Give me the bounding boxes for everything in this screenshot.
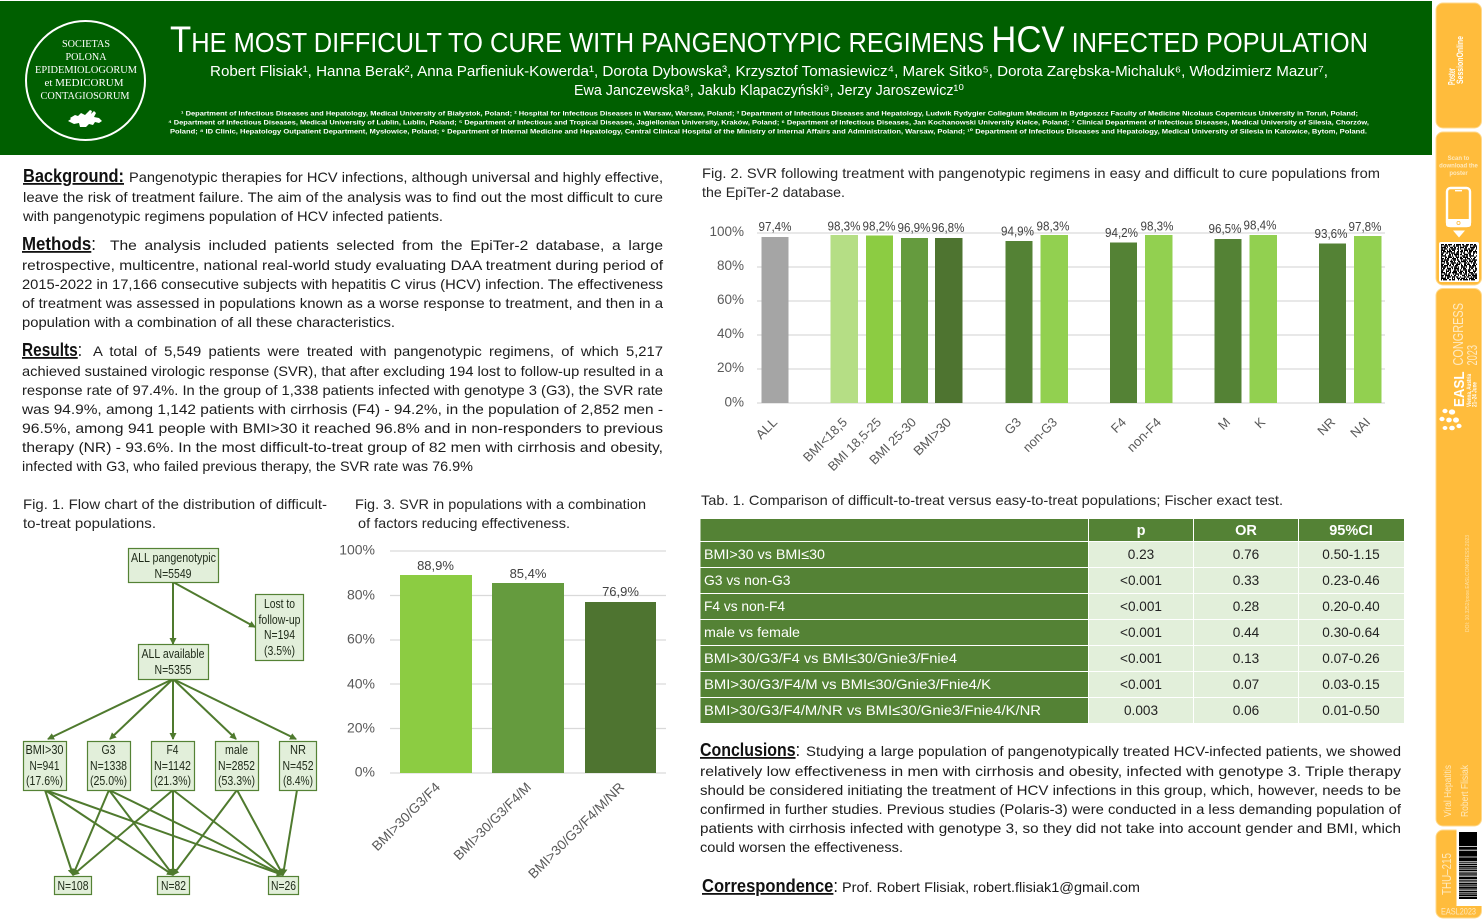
bar: K <box>1244 218 1277 431</box>
authors: Ewa Janczewska⁸, Jakub Klapaczyński⁹, Jerzy Jaroszewicz¹⁰ <box>574 82 964 99</box>
bar chart: figure 3: 60% <box>347 630 375 646</box>
box: NR <box>280 742 316 790</box>
bar: BMI 25-30 <box>866 221 930 468</box>
bar: non-G3: 98,3% <box>1036 220 1070 234</box>
bar: non-F4 <box>1124 220 1174 455</box>
bar: NR: NR <box>1314 415 1338 438</box>
bar: non-F4: 98,3% <box>1140 220 1174 234</box>
sidebar panel: scan to download: poster <box>1449 171 1468 177</box>
bar: F4: 94,2% <box>1105 226 1138 240</box>
bar: BMI>30/G3/F4/M/NR: BMI>30/G3/F4/M/NR <box>525 779 627 881</box>
text block: correspondence: Prof. Robert Flisiak, robert.flisiak1@gmail.com <box>842 879 1140 895</box>
sidebar panel: EASL Congress: Robert Flisiak <box>1460 764 1471 817</box>
box: F4: N=1142 <box>154 759 191 773</box>
logo: Societas Polona: SOCIETAS <box>62 39 110 50</box>
table row: BMI <box>704 546 1380 562</box>
box: G3: G3 <box>102 743 116 757</box>
box: F4: F4 <box>166 743 179 757</box>
box: N=108: N=108 <box>58 879 89 893</box>
caption: figure 3: of factors reducing effectiveness. <box>358 515 570 531</box>
table row: BMI/G3/F4: 0.13 <box>1233 651 1259 666</box>
bar: BMI 18,5-25 <box>825 220 896 474</box>
bar: F4 <box>1105 226 1138 436</box>
flow chart <box>24 548 316 894</box>
text block: results: response rate of 97.4%. In the group of 1,338 patients infected with genotype 3 (G3), the SVR rate <box>22 382 663 398</box>
header banner <box>0 1 1432 155</box>
table row: BMI: 0.76 <box>1233 547 1259 562</box>
caption: table 1: Tab. 1. Comparison of difficult-to-treat versus easy-to-treat populations; Fischer exact test. <box>701 492 1283 508</box>
sidebar panel: EASL Congress: Vienna, Austria <box>1467 374 1473 407</box>
sidebar panel: scan to download: download the <box>1439 164 1478 170</box>
sidebar panel: EASL Congress: EASL <box>1451 372 1468 407</box>
text block: results: achieved sustained virologic response (SVR), that after excluding 194 lost to follow-up resulted in a <box>22 363 663 379</box>
table row: F4: F4 vs non-F4 <box>704 598 785 614</box>
bar: NR <box>1314 227 1348 438</box>
box: N=26 <box>268 876 298 894</box>
box: N=82 <box>158 876 190 894</box>
y axis labels: 100% <box>709 224 744 239</box>
affiliations <box>168 110 1369 136</box>
logo: Societas Polona: et MEDICORUM <box>44 78 124 89</box>
box: male: N=2852 <box>218 759 255 773</box>
text block: methods: retrospective, multicentre, national real-world study evaluating DAA treatment during period of <box>22 257 663 273</box>
sidebar panel: poster number and barcode: EASL2023 <box>1441 906 1476 916</box>
text block: conclusions: Studying a large population of pangenotypically treated HCV-infected patients, we showed <box>806 743 1401 759</box>
table row: BMI/G3/F4/M: <0.001 <box>1120 677 1162 692</box>
authors <box>210 63 1328 99</box>
bar: ALL: 97,4% <box>758 220 792 234</box>
box: G3: (25.0%) <box>90 774 127 788</box>
bar: BMI>30/G3/F4: BMI>30/G3/F4 <box>369 779 443 854</box>
title: THE MOST DIFFICULT TO CURE WITH PANGENOTYPIC REGIMENS HCV INFECTED POPULATION <box>170 18 1368 60</box>
box: all available <box>138 644 208 680</box>
table row: G3: 0.33 <box>1233 573 1259 588</box>
text block: methods: 2015-2022 in 17,166 consecutive subjects with hepatitis C virus (HCV) infection. The effectiveness <box>22 276 663 292</box>
heading: background: Background: <box>23 166 124 186</box>
box: NR: (8.4%) <box>283 774 313 788</box>
icon: EASL flower <box>1439 409 1462 430</box>
bar: non-G3: non-G3 <box>1020 415 1060 455</box>
sidebar panel: poster session online: SessionOnline <box>1455 36 1465 84</box>
bar: non-F4: non-F4 <box>1124 415 1164 455</box>
bar: NAI <box>1347 220 1382 440</box>
table row: male: 0.44 <box>1233 625 1260 640</box>
text block: conclusions: should be considered initiating the treatment of HCV infections in this group, which, however, needs to be <box>700 782 1401 798</box>
text block: correspondence <box>702 876 1140 896</box>
box: male <box>216 742 258 790</box>
heading: results: Results: <box>22 340 82 360</box>
box: all pangenotypic <box>128 548 218 582</box>
logo: Societas Polona: EPIDEMIOLOGORUM <box>35 65 137 76</box>
bar chart: figure 3: 20% <box>347 720 375 736</box>
table row: G3: 0.23-0.46 <box>1322 573 1380 588</box>
caption: figure 2: the EpiTer-2 database. <box>702 184 845 200</box>
text block: results: was 94.9%, among 1,142 patients with cirrhosis (F4) - 94.2%, in the population of 2,852 men - <box>21 401 663 417</box>
sidebar panel: EASL Congress: Viral Hepatitis <box>1443 765 1454 817</box>
box: lost to follow-up: Lost to <box>264 597 295 611</box>
box: G3 <box>88 742 130 790</box>
sidebar panel: EASL Congress <box>1436 288 1482 826</box>
caption: figure 2 <box>702 165 1380 200</box>
text block: conclusions: confirmed in further studies. Previous studies (Polaris-3) were conducted in a less demanding population of <box>700 801 1401 817</box>
box: N=26: N=26 <box>271 879 296 893</box>
y axis labels <box>709 224 744 410</box>
box: NR: N=452 <box>282 759 314 773</box>
sidebar panel: poster number and barcode <box>1436 829 1482 918</box>
bar: G3: 94,9% <box>1001 224 1034 238</box>
table row: G3 <box>704 572 1380 588</box>
text block: conclusions: could worsen the effectiveness. <box>700 839 903 855</box>
table: comparison <box>700 519 1404 723</box>
table row: BMI: 0.50-1.15 <box>1322 547 1380 562</box>
bar: G3: G3 <box>1001 415 1024 437</box>
heading: conclusions: Conclusions: <box>700 740 800 760</box>
bar: ALL: ALL <box>753 415 780 442</box>
text block: methods <box>22 234 663 330</box>
bar: NR: 93,6% <box>1314 227 1348 241</box>
text block: results: therapy (NR) - 93.6%. In the most difficult-to-treat group of 82 men with cirrhosis and obesity, <box>22 439 663 455</box>
bar: M <box>1208 222 1242 433</box>
logo: Societas Polona: POLONA <box>66 52 107 63</box>
table header <box>1137 523 1373 539</box>
bar: BMI>30/G3/F4/M <box>451 566 564 863</box>
table row: BMI/G3/F4/M <box>704 676 1380 692</box>
caption: figure 1: Fig. 1. Flow chart of the distribution of difficult- <box>23 496 327 512</box>
bar: BMI>30/G3/F4 <box>369 558 472 854</box>
bar: ALL <box>753 220 792 442</box>
authors: Robert Flisiak¹, Hanna Berak², Anna Parfieniuk-Kowerda¹, Dorota Dybowska³, Krzysztof Tomasiewicz⁴, Marek Sitko⁵, Dorota Zarębska-Michaluk⁶, Włodzimierz Mazur⁷, <box>210 63 1328 80</box>
sidebar panel: scan to download <box>1436 132 1482 285</box>
box: all available: N=5355 <box>154 663 192 677</box>
box: male: male <box>225 743 248 757</box>
text block: background: with pangenotypic regimens population of HCV infected patients. <box>22 208 443 224</box>
bar: BMI 25-30: 96,9% <box>898 221 930 235</box>
bar: BMI>30/G3/F4: 88,9% <box>417 558 454 573</box>
table row: F4: <0.001 <box>1120 599 1162 614</box>
bar chart: figure 3 <box>339 542 666 881</box>
text block: methods: The analysis included patients selected from the EpiTer-2 database, a large <box>110 237 663 253</box>
box: lost to follow-up <box>256 594 304 660</box>
bar: BMI>30/G3/F4/M/NR: 76,9% <box>602 584 639 599</box>
sidebar panel: EASL Congress: 2023 <box>1464 345 1481 366</box>
box: all available: ALL available <box>142 647 205 661</box>
text block: background: Pangenotypic therapies for HCV infections, although universal and highly effective, <box>129 169 663 185</box>
bar: BMI<18,5: BMI<18,5 <box>800 415 850 465</box>
bar: BMI<18,5 <box>800 220 860 465</box>
text block: methods: population with a combination of all these characteristics. <box>22 314 395 330</box>
bar chart: figure 3: 80% <box>347 586 375 602</box>
table row: BMI/G3/F4 <box>704 650 1380 666</box>
bar: BMI>30 <box>910 221 964 458</box>
box: F4 <box>152 742 194 790</box>
caption: figure 3: Fig. 3. SVR in populations with a combination <box>355 496 646 512</box>
sidebar panel: EASL Congress: 21–24 June <box>1472 381 1478 407</box>
table row: male <box>704 624 1380 640</box>
table header: OR <box>1235 523 1257 539</box>
sidebar panel: poster number and barcode: THU–215 <box>1439 853 1454 895</box>
table row: male: male vs female <box>704 624 800 640</box>
table row: BMI/G3/F4/M/NR: 0.01-0.50 <box>1322 703 1380 718</box>
box: F4: (21.3%) <box>154 774 191 788</box>
icon: phone <box>1446 188 1471 238</box>
bar: BMI>30/G3/F4/M/NR <box>525 584 656 881</box>
bar: M: M <box>1215 415 1233 433</box>
sidebar panel: scan to download: Scan to <box>1448 156 1470 162</box>
bar: BMI<18,5: 98,3% <box>828 220 860 234</box>
bar: BMI 18,5-25: BMI 18,5-25 <box>825 415 884 474</box>
affiliations: ¹ Department of Infectious Diseases and Hepatology, Medical University of Białystok, Poland; ² Hospital for Infectious Diseases in Warsaw, Warsaw, Poland; ³ Department of Infectious Diseases and Hepatology, Ludwik Rydygier Collegium Medicum in Bydgoszcz Faculty of Medicine Nicolaus Copernicus University in Toruń, Poland; <box>181 110 1358 118</box>
text block: background <box>22 166 663 224</box>
table row: BMI/G3/F4: BMI>30/G3/F4 vs BMI≤30/Gnie3/Fnie4 <box>704 650 957 666</box>
bar: BMI>30/G3/F4/M: BMI>30/G3/F4/M <box>451 780 534 863</box>
text block: results: 96.5%, among 941 people with BMI>30 it reached 96.8% and in non-responders to previous <box>22 420 663 436</box>
box: G3: N=1338 <box>90 759 127 773</box>
box: BMI>30: BMI>30 <box>26 743 64 757</box>
y axis labels: 0% <box>724 394 744 410</box>
table row: BMI: 0.23 <box>1128 547 1154 562</box>
bar chart: figure 3: 100% <box>339 542 375 558</box>
box: N=108 <box>54 876 92 894</box>
affiliations: Poland; ⁸ ID Clinic, Hepatology Outpatient Department, Mysłowice, Poland; ⁹ Department of Internal Medicine and Hepatology, Central Clinical Hospital of the Ministry of Internal Affairs and Administration, Warsaw, Poland; ¹⁰ Department of Infectious Diseases and Hepatology, Medical University of Silesia in Katowice, Bytom, Poland. <box>170 128 1367 136</box>
bar: non-G3 <box>1020 220 1070 455</box>
table header: 95%CI <box>1329 523 1373 539</box>
table row: BMI/G3/F4/M/NR: 0.06 <box>1233 703 1259 718</box>
y axis labels: 80% <box>717 258 744 273</box>
bar chart: figure 3: 0% <box>355 764 375 780</box>
table row: G3: <0.001 <box>1120 573 1162 588</box>
text block: conclusions: patients with cirrhosis infected with genotype 3, so they did not take into account gender and BMI, which <box>700 820 1401 836</box>
affiliations: ⁴ Department of Infectious Diseases, Medical University of Lublin, Lublin, Poland; ⁵ Department of Infectious and Tropical Diseases, Jagiellonian University, Kraków, Poland; ⁶ Department of Infectious Diseases, Jan Kochanowski University Kielce, Poland; ⁷ Clinical Department of Infectious Diseases, Medical University of Silesia, Chorzów, <box>168 120 1369 126</box>
bar: BMI 18,5-25: 98,2% <box>862 220 896 234</box>
text block: methods: of treatment was assessed in populations known as a worse response to treatment, and then in a <box>22 295 663 311</box>
box: lost to follow-up: (3.5%) <box>264 644 295 658</box>
table row: BMI: BMI>30 vs BMI≤30 <box>704 546 825 562</box>
bar: G3 <box>1001 224 1034 437</box>
arrows: main flow <box>48 582 296 739</box>
bar chart: figure 3: 40% <box>347 676 375 692</box>
box: BMI>30: (17.6%) <box>26 774 63 788</box>
sidebar panel: poster session online <box>1436 3 1482 128</box>
y axis labels: 60% <box>717 292 744 307</box>
bar: BMI>30/G3/F4/M: 85,4% <box>510 566 547 581</box>
logo: Societas Polona <box>26 21 145 140</box>
table row: F4: 0.20-0.40 <box>1322 599 1380 614</box>
table row: F4 <box>704 598 1380 614</box>
table row: G3: G3 vs non-G3 <box>704 572 791 588</box>
table row: BMI/G3/F4/M/NR: BMI>30/G3/F4/M/NR vs BMI≤30/Gnie3/Fnie4/K/NR <box>704 702 1041 718</box>
text block: results <box>21 340 663 474</box>
table row: BMI/G3/F4: <0.001 <box>1120 651 1162 666</box>
text block: background: leave the risk of treatment failure. The aim of the analysis was to find out the most difficult to cure <box>23 189 663 205</box>
text block: correspondence: Correspondence: <box>702 876 838 896</box>
sidebar panel: poster session online: Poster <box>1447 68 1458 85</box>
caption: figure 1: to-treat populations. <box>23 515 156 531</box>
table row: BMI/G3/F4/M: BMI>30/G3/F4/M vs BMI≤30/Gnie3/Fnie4/K <box>704 676 992 692</box>
text block: results: infected with G3, who failed previous therapy, the SVR rate was 76.9% <box>22 458 473 474</box>
box: BMI>30: N=941 <box>30 759 60 773</box>
caption: figure 2: Fig. 2. SVR following treatment with pangenotypic regimens in easy and difficult to cure populations from <box>702 165 1380 181</box>
table row: male: <0.001 <box>1120 625 1162 640</box>
table row: BMI/G3/F4: 0.07-0.26 <box>1322 651 1380 666</box>
QR code <box>1439 242 1479 282</box>
bar: BMI>30: BMI>30 <box>910 415 954 458</box>
table row: BMI/G3/F4/M/NR: 0.003 <box>1124 703 1158 718</box>
caption: figure 1 <box>23 496 327 531</box>
sidebar panel: EASL Congress: DOI: 10.3252/pooe.EASLCONGRESS.2023 <box>1465 535 1471 632</box>
table row: male: 0.30-0.64 <box>1322 625 1380 640</box>
sidebar <box>1436 3 1482 918</box>
box: lost to follow-up: N=194 <box>264 628 295 642</box>
bar: BMI 25-30: BMI 25-30 <box>866 415 919 468</box>
arrows: combination flow <box>45 790 297 875</box>
bar: M: 96,5% <box>1208 222 1242 236</box>
logo: Societas Polona: CONTAGIOSORUM <box>40 91 130 102</box>
table row: BMI/G3/F4/M: 0.03-0.15 <box>1322 677 1380 692</box>
y axis labels: 40% <box>717 326 744 341</box>
box: BMI>30 <box>24 742 66 790</box>
box: lost to follow-up: follow-up <box>258 613 301 627</box>
box: male: (53.3%) <box>218 774 255 788</box>
caption: figure 3 <box>355 496 646 531</box>
bar chart: figure 2 <box>709 218 1385 474</box>
bar: BMI>30: 96,8% <box>932 221 964 235</box>
table row: BMI/G3/F4/M/NR <box>704 702 1380 718</box>
box: N=82: N=82 <box>161 879 186 893</box>
table header: p <box>1137 523 1146 539</box>
bar: NAI: 97,8% <box>1348 220 1382 234</box>
bar: K: 98,4% <box>1244 218 1276 232</box>
sidebar panel: EASL Congress: CONGRESS <box>1450 303 1467 366</box>
box: all pangenotypic: ALL pangenotypic <box>131 551 216 565</box>
heading: methods: Methods: <box>22 234 96 254</box>
table row: F4: 0.28 <box>1233 599 1259 614</box>
text block: conclusions: relatively low effectiveness in men with cirrhosis and obesity, infected with genotype 3. Triple therapy <box>700 763 1401 779</box>
box: NR: NR <box>290 743 306 757</box>
text block: conclusions <box>700 740 1401 855</box>
table row: BMI/G3/F4/M: 0.07 <box>1233 677 1259 692</box>
bar: F4: F4 <box>1108 415 1129 436</box>
bar: NAI: NAI <box>1347 415 1373 440</box>
y axis labels: 20% <box>717 360 744 375</box>
text block: results: A total of 5,549 patients were treated with pangenotypic regimens, of which 5,217 <box>93 343 663 359</box>
bar: K: K <box>1251 414 1268 431</box>
box: all pangenotypic: N=5549 <box>154 567 192 581</box>
